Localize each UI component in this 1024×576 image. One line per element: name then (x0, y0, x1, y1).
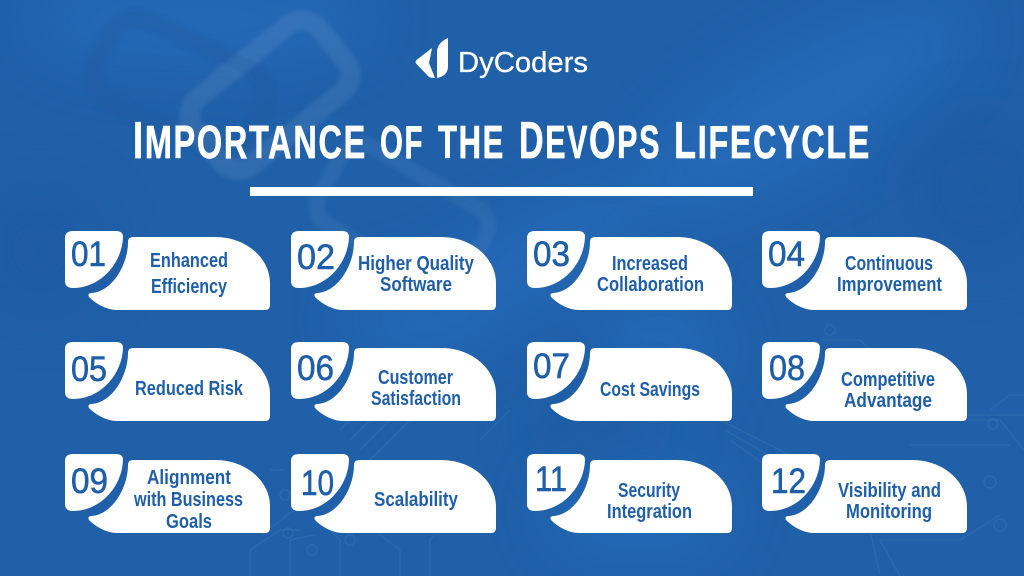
number 12: 12 (771, 462, 806, 501)
label: Enhanced Efficiency: Efficiency (151, 276, 228, 298)
card 12 (762, 454, 967, 533)
number tab 07 (527, 342, 585, 399)
label card 08 (785, 348, 967, 421)
number tab 06 (291, 342, 349, 399)
logo: DyCoders (416, 38, 588, 79)
label: Security Integration: Security (618, 480, 681, 502)
card 11 (527, 454, 732, 533)
label card 01 (88, 237, 270, 310)
number 03: 03 (533, 235, 570, 274)
card 05 (65, 342, 270, 421)
logo wordmark: DyCoders (458, 47, 588, 79)
icon: logo bar (437, 38, 448, 78)
label card 06 (314, 348, 496, 421)
label card 07 (550, 348, 732, 421)
label: Increased Collaboration (597, 253, 704, 296)
label: Enhanced Efficiency (150, 250, 228, 298)
number 01: 01 (71, 235, 106, 274)
label: Customer Satisfaction (371, 367, 461, 410)
label: Alignment with Business Goals: Alignment (147, 467, 231, 489)
label: Competitive Advantage: Competitive (841, 369, 935, 391)
card 06 (291, 342, 496, 421)
label: Higher Quality Software (358, 253, 475, 296)
label card 04 (785, 237, 967, 310)
title: THE (438, 116, 505, 168)
card 03 (527, 231, 732, 310)
label: Increased Collaboration: Increased (612, 253, 688, 275)
number tab 04 (762, 231, 820, 288)
number tab 02 (291, 231, 349, 288)
label: Reduced Risk: Reduced Risk (135, 378, 244, 400)
number 09: 09 (71, 462, 108, 501)
label: Security Integration (607, 480, 692, 523)
card 01 (65, 231, 270, 310)
number 02: 02 (297, 238, 335, 277)
number tab 08 (762, 342, 820, 399)
title (133, 112, 871, 170)
number 04: 04 (768, 235, 805, 274)
number 07: 07 (533, 347, 570, 386)
number 06: 06 (297, 349, 334, 388)
number tab 10 (291, 454, 349, 511)
title: OF (380, 116, 424, 168)
label: Higher Quality Software: Higher Quality (358, 253, 475, 275)
number tab 05 (65, 342, 123, 399)
number 08: 08 (769, 349, 805, 388)
label card 03 (550, 237, 732, 310)
label card 09 (88, 460, 270, 533)
label: Customer Satisfaction: Satisfaction (371, 388, 461, 410)
title underline (250, 187, 753, 196)
label: Competitive Advantage (841, 369, 935, 412)
number 11: 11 (535, 460, 567, 499)
number tab 01 (65, 231, 123, 288)
number tab 11 (527, 454, 585, 511)
label: Alignment with Business Goals: with Business (133, 489, 243, 511)
title: IMPORTANCE (133, 112, 367, 170)
label: Scalability: Scalability (374, 489, 459, 511)
number 10: 10 (301, 464, 334, 503)
number tab 12 (762, 454, 820, 511)
label: Higher Quality Software: Software (380, 274, 452, 296)
label card 11 (550, 460, 732, 533)
card 09 (65, 454, 270, 533)
title: LIFECYCLE (674, 112, 871, 170)
label card 10 (314, 460, 496, 533)
label card 02 (314, 237, 496, 310)
number 05: 05 (71, 350, 107, 389)
card 07 (527, 342, 732, 421)
label card 05 (88, 348, 270, 421)
number tab 09 (65, 454, 123, 511)
label: Competitive Advantage: Advantage (844, 390, 932, 412)
label: Visibility and Monitoring: Monitoring (846, 501, 932, 523)
card 10 (291, 454, 496, 533)
label: Continuous Improvement (837, 253, 942, 296)
label card 12 (785, 460, 967, 533)
card 08 (762, 342, 967, 421)
number tab 03 (527, 231, 585, 288)
label: Visibility and Monitoring: Visibility and (838, 480, 941, 502)
label: Alignment with Business Goals: Goals (166, 511, 212, 533)
label: Security Integration: Integration (607, 501, 692, 523)
label: Enhanced Efficiency: Enhanced (150, 250, 228, 272)
label: Continuous Improvement: Continuous (845, 253, 933, 275)
card 02 (291, 231, 496, 310)
card 04 (762, 231, 967, 310)
label: Increased Collaboration: Collaboration (597, 274, 704, 296)
label: Cost Savings: Cost Savings (600, 379, 700, 401)
label: Customer Satisfaction: Customer (378, 367, 453, 389)
label: Continuous Improvement: Improvement (837, 274, 942, 296)
icon: logo chevron (416, 48, 435, 78)
title: DEVOPS (519, 112, 661, 170)
label: Visibility and Monitoring (838, 480, 941, 523)
label: Alignment with Business Goals (133, 467, 243, 533)
